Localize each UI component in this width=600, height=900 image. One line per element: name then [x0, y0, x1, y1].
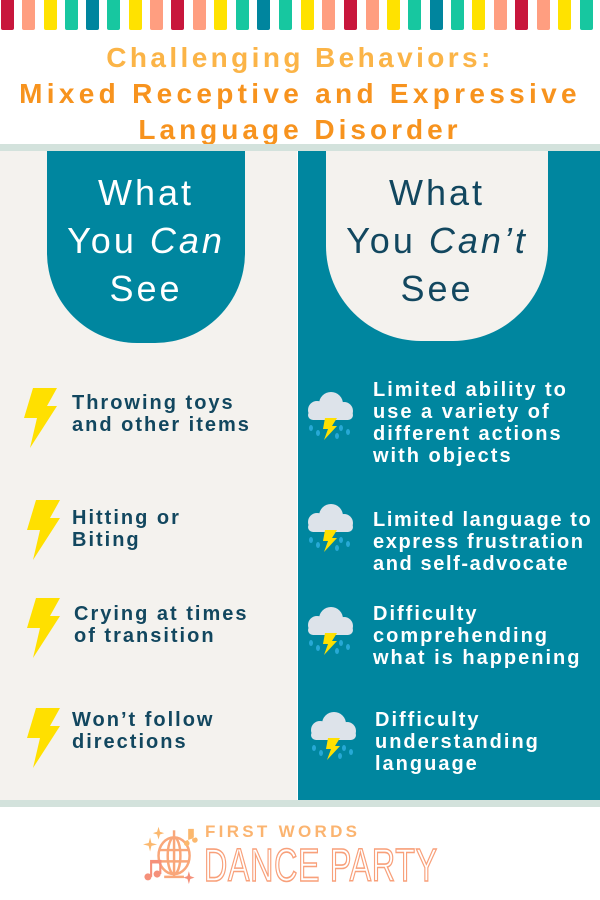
logo: DANCE PARTY [204, 839, 438, 891]
panel: what you can see [0, 151, 297, 800]
item: limited language: and self-advocate [373, 553, 569, 575]
item: difficulty understanding: Difficulty [375, 709, 481, 731]
logo text: FIRST WORDS [205, 822, 360, 841]
header: what you can see: You Can [67, 220, 225, 261]
item: limited ability: with objects [373, 445, 513, 467]
icon: lightning 2 [27, 500, 60, 560]
icon: storm cloud 4 [311, 712, 356, 760]
item: won't follow: directions [72, 731, 188, 753]
item: difficulty understanding: understanding [375, 731, 540, 753]
item: difficulty comprehending [372, 603, 581, 669]
item: won't follow [72, 709, 214, 753]
icon: storm cloud 3 [308, 607, 353, 655]
header: what you can't see: What [389, 172, 485, 213]
title: Mixed Receptive and Expressive [19, 78, 581, 109]
item: crying: of transition [74, 625, 216, 647]
item: limited language [373, 509, 592, 575]
item: throwing toys: and other items [72, 414, 251, 436]
item: difficulty comprehending: what is happening [373, 647, 581, 669]
item: limited ability: different actions [373, 423, 563, 445]
item: hitting: Biting [72, 529, 141, 551]
item: throwing toys: Throwing toys [72, 392, 235, 414]
item: difficulty understanding: language [375, 753, 479, 775]
icon: lightning 4 [27, 708, 60, 768]
item: difficulty comprehending: Difficulty [373, 603, 479, 625]
title [19, 42, 581, 145]
logo [143, 822, 438, 891]
header: what you can see [47, 151, 245, 343]
item: limited ability: use a variety of [373, 401, 551, 423]
item: throwing toys [72, 392, 251, 436]
icon: lightning 1 [24, 388, 57, 448]
item: limited language: Limited language to [373, 509, 592, 531]
icon: storm cloud 2 [308, 504, 353, 552]
header: what you can see: See [109, 268, 183, 309]
header: what you can't see: You Can’t [346, 220, 528, 261]
icon: lightning 3 [27, 598, 60, 658]
header: what you can't see [326, 151, 548, 341]
icon: disco globe [143, 826, 198, 884]
item: won't follow: Won’t follow [72, 709, 214, 731]
item: hitting [72, 507, 181, 551]
item: limited ability [372, 379, 568, 467]
item: hitting: Hitting or [72, 507, 181, 529]
item: limited language: express frustration [373, 531, 585, 553]
icon: storm cloud 1 [308, 392, 353, 440]
panel: what you can't see [298, 151, 600, 800]
title: Challenging Behaviors: [106, 42, 494, 73]
item: limited ability: Limited ability to [373, 379, 568, 401]
header: what you can see: What [98, 172, 194, 213]
item: crying [74, 603, 248, 647]
header: what you can't see: See [400, 268, 474, 309]
item: difficulty comprehending: comprehending [373, 625, 549, 647]
item: crying: Crying at times [74, 603, 248, 625]
title: Language Disorder [138, 114, 462, 145]
stripes banner [1, 0, 593, 30]
item: difficulty understanding [375, 709, 540, 775]
